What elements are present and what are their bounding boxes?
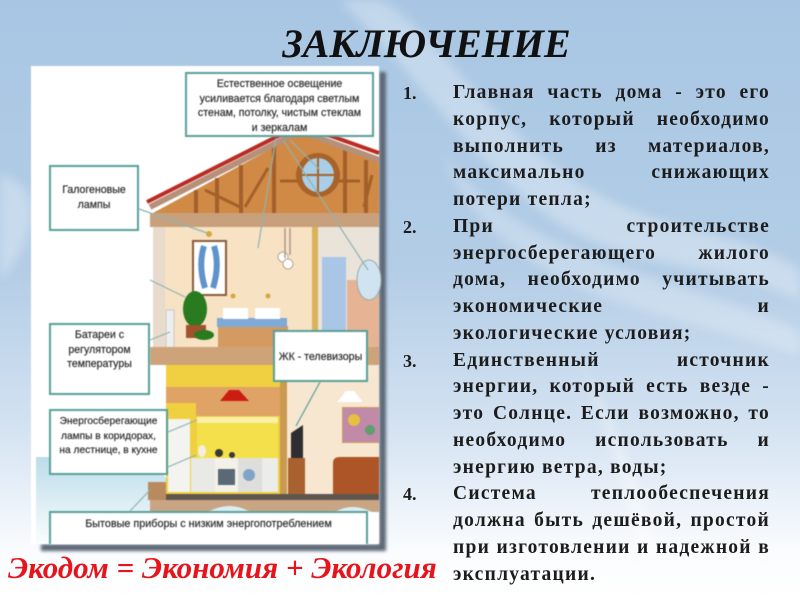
title: ЗАКЛЮЧЕНИЕ: [282, 21, 571, 66]
bed: [217, 308, 288, 348]
item 1: максимально снижающих: [453, 162, 770, 183]
item 3: энергию ветра, воды;: [453, 456, 668, 478]
item 1: [403, 82, 770, 210]
attic round window: [296, 153, 340, 197]
beam: [150, 213, 379, 227]
callout: low consumption appliances: [49, 511, 368, 544]
item 3: необходимо использовать и: [453, 430, 770, 451]
bathroom: [312, 227, 381, 349]
callout: halogen lamps: Галогеновые: [62, 184, 126, 196]
plant: [183, 291, 214, 340]
item 2: При строительстве: [453, 216, 770, 237]
floor and foundation: [148, 482, 379, 512]
item 4: должна быть дешёвой, простой: [453, 510, 770, 531]
eco-house formula: Экодом = Экономия + Экология: [8, 550, 437, 585]
upper floor walls: [155, 227, 379, 349]
partition: [280, 365, 287, 495]
item 2: 2.: [403, 217, 416, 237]
callout: natural light: Естественное освещение: [217, 78, 342, 90]
callout: radiators: Батареи с: [75, 329, 124, 341]
item 4: [403, 483, 770, 584]
callout: energy saving lamps: [49, 409, 168, 475]
callout: low consumption appliances: Бытовые приборы с низким энергопотреблением: [85, 518, 332, 530]
item 3: 3.: [403, 350, 416, 370]
item 3: Единственный источник: [453, 350, 770, 370]
callout: halogen lamps: [49, 165, 139, 231]
ground: [36, 457, 166, 544]
item 2: [403, 216, 770, 344]
gable: [147, 125, 379, 213]
floor band: [150, 347, 379, 365]
callout: energy saving lamps: лампы в коридорах,: [61, 431, 156, 442]
item 1: 1.: [403, 83, 416, 103]
callout: halogen lamps: лампы: [78, 199, 110, 211]
item 1: потери тепла;: [453, 189, 592, 210]
callout: radiators: [49, 323, 150, 395]
item 3: [403, 350, 770, 478]
callout: radiators: температуры: [67, 358, 132, 370]
item 2: экологические условия;: [453, 323, 692, 344]
item 3: это Солнце. Если возможно, то: [453, 403, 770, 424]
callout: natural light: усиливается благодаря светлым: [200, 93, 359, 105]
item 4: 4.: [403, 484, 416, 504]
item 4: эксплуатации.: [453, 564, 596, 584]
leader lines: [130, 138, 368, 511]
callout: LCD TVs: [273, 330, 368, 382]
callout: natural light: стенам, потолку, чистым стеклам: [198, 107, 361, 119]
item 2: энергосберегающего жилого: [453, 242, 770, 264]
callout: natural light: [185, 72, 374, 137]
living room: [287, 365, 379, 495]
item 1: выполнить из материалов,: [453, 136, 770, 156]
item 1: корпус, который необходимо: [453, 109, 770, 130]
item 3: энергии, который есть везде -: [453, 376, 770, 397]
callout: energy saving lamps: на лестнице, в кухне: [59, 445, 158, 456]
item 2: дома, необходимо учитывать: [453, 269, 770, 290]
radiator: [166, 310, 174, 348]
callout: radiators: регулятором: [68, 344, 131, 356]
item 2: экономические и: [453, 296, 770, 317]
callout: natural light: и зеркалам: [252, 122, 307, 134]
callout: energy saving lamps: Энергосберегающие: [60, 416, 157, 427]
ceiling lamps: [206, 228, 293, 298]
item 4: Система теплообеспечения: [453, 483, 770, 504]
item 1: Главная часть дома - это его: [453, 82, 770, 103]
kitchen: [166, 365, 280, 495]
item 4: при изготовлении и надежной в: [453, 537, 770, 558]
white panel: [31, 66, 379, 544]
numbered conclusions list: [403, 82, 770, 584]
wall picture: [193, 241, 226, 295]
callout: LCD TVs: ЖК - телевизоры: [279, 351, 362, 363]
